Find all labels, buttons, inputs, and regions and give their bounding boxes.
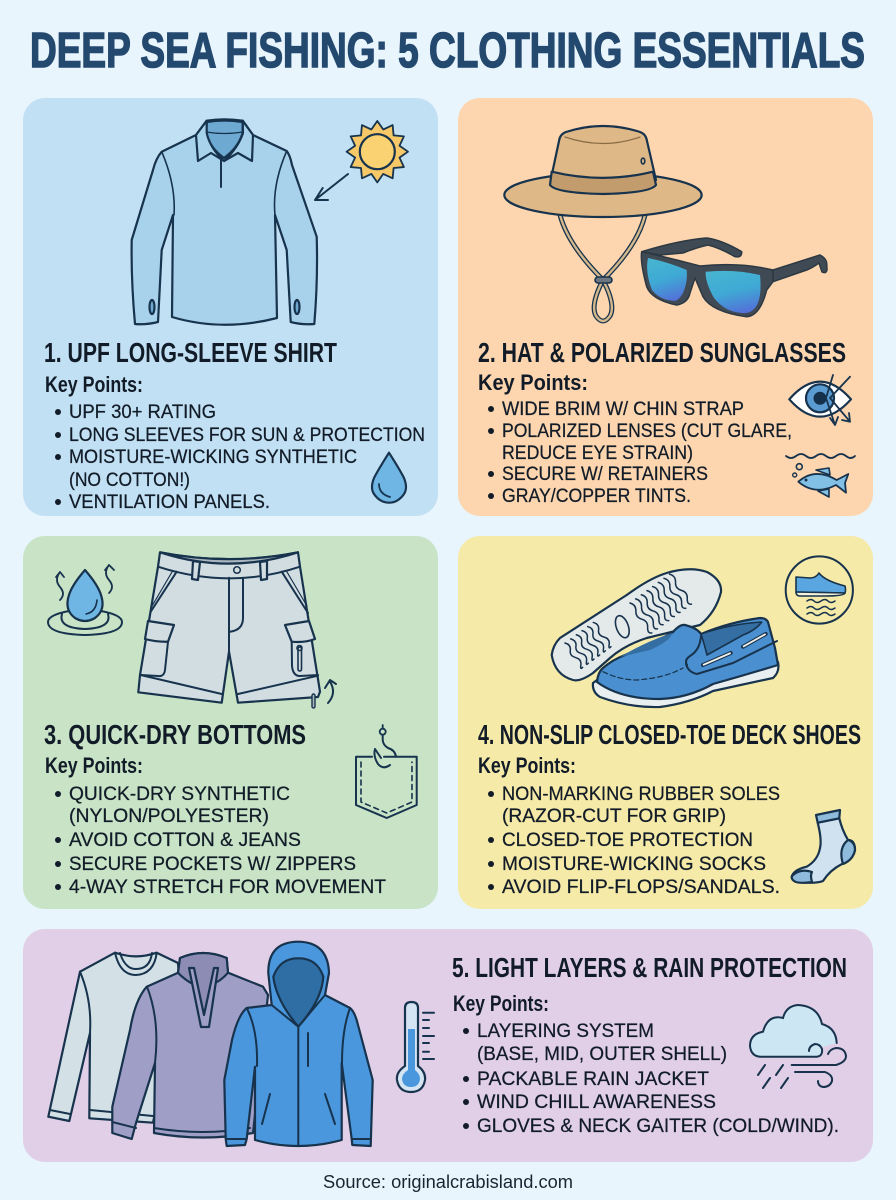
bullet list: WIDE BRIM W/ CHIN STRAP bbox=[502, 398, 744, 420]
icon: shoe traction circle bbox=[786, 556, 853, 624]
icon: chin strap cord bbox=[560, 215, 645, 321]
bullet list: MOISTURE-WICKING SOCKS bbox=[502, 853, 766, 875]
bullet list: LONG SLEEVES FOR SUN & PROTECTION bbox=[69, 424, 425, 446]
heading: 3. QUICK-DRY BOTTOMS bbox=[44, 719, 306, 750]
bullet list: 4-WAY STRETCH FOR MOVEMENT bbox=[69, 876, 386, 898]
icon: shoe sole bbox=[552, 569, 721, 680]
icon: cloud, rain and wind bbox=[750, 1005, 846, 1088]
bullet list: PACKABLE RAIN JACKET bbox=[477, 1068, 709, 1090]
bullet list: GLOVES & NECK GAITER (COLD/WIND). bbox=[477, 1115, 839, 1137]
key points label: Key Points: bbox=[478, 370, 588, 395]
bullet list: VENTILATION PANELS. bbox=[69, 491, 270, 513]
bullet list: UPF 30+ RATING bbox=[69, 401, 216, 423]
key points label: Key Points: bbox=[453, 991, 549, 1016]
bullet list: SECURE POCKETS W/ ZIPPERS bbox=[69, 853, 356, 875]
icon: eye with glare bbox=[789, 375, 851, 425]
bullet list: LAYERING SYSTEM bbox=[477, 1020, 654, 1042]
icon: rain jacket with hood bbox=[224, 942, 373, 1146]
panel: hat and polarized sunglasses bbox=[458, 98, 873, 516]
key points label: Key Points: bbox=[45, 753, 143, 778]
panel: non-slip deck shoes bbox=[458, 536, 873, 909]
bullet list: MOISTURE-WICKING SYNTHETIC bbox=[69, 446, 357, 468]
bullet list: CLOSED-TOE PROTECTION bbox=[502, 829, 753, 851]
icon: cargo shorts bbox=[138, 552, 336, 708]
icon: thermometer bbox=[397, 1002, 434, 1092]
source note: Source: originalcrabisland.com bbox=[323, 1172, 573, 1192]
bullet list: (NO COTTON!) bbox=[69, 469, 190, 491]
arrow: sun to shirt bbox=[315, 174, 348, 200]
bullet list bbox=[55, 401, 425, 513]
icon: sock bbox=[792, 810, 855, 883]
icon: water drop bbox=[372, 453, 406, 503]
icon: drying water drop bbox=[48, 565, 122, 635]
icon: wide-brim hat bbox=[504, 126, 702, 217]
icon: blue boat shoe bbox=[593, 618, 778, 707]
icon: pocket with hook bbox=[356, 725, 417, 818]
panel: quick-dry bottoms bbox=[23, 536, 438, 909]
bullet list bbox=[488, 783, 780, 898]
key points label: Key Points: bbox=[45, 372, 143, 397]
icon: base layer shirt bbox=[48, 953, 180, 1123]
bullet list: GRAY/COPPER TINTS. bbox=[502, 485, 691, 507]
bullet list bbox=[488, 398, 792, 507]
bullet list: (BASE, MID, OUTER SHELL) bbox=[477, 1043, 727, 1065]
icon: sun bbox=[347, 121, 408, 182]
panel: UPF long-sleeve shirt bbox=[23, 98, 438, 516]
icon: long-sleeve shirt bbox=[132, 119, 317, 325]
bullet list: WIND CHILL AWARENESS bbox=[477, 1091, 716, 1113]
bullet list bbox=[55, 783, 386, 898]
icon: polarized sunglasses bbox=[641, 238, 827, 317]
bullet list: REDUCE EYE STRAIN) bbox=[502, 442, 693, 464]
bullet list: AVOID COTTON & JEANS bbox=[69, 829, 301, 851]
bullet list: POLARIZED LENSES (CUT GLARE, bbox=[502, 420, 792, 442]
icon: fish under water bbox=[786, 454, 855, 497]
bullet list: (NYLON/POLYESTER) bbox=[69, 805, 269, 827]
bullet list: (RAZOR-CUT FOR GRIP) bbox=[502, 805, 726, 827]
bullet list: QUICK-DRY SYNTHETIC bbox=[69, 783, 290, 805]
icon: mid layer quarter-zip bbox=[112, 953, 268, 1139]
bullet list: NON-MARKING RUBBER SOLES bbox=[502, 783, 780, 805]
key points label: Key Points: bbox=[478, 753, 576, 778]
heading: 1. UPF LONG-SLEEVE SHIRT bbox=[44, 337, 337, 368]
bullet list: AVOID FLIP-FLOPS/SANDALS. bbox=[502, 876, 780, 898]
bullet list: SECURE W/ RETAINERS bbox=[502, 463, 708, 485]
panel: light layers and rain protection bbox=[23, 929, 873, 1162]
bullet list bbox=[463, 1020, 839, 1137]
